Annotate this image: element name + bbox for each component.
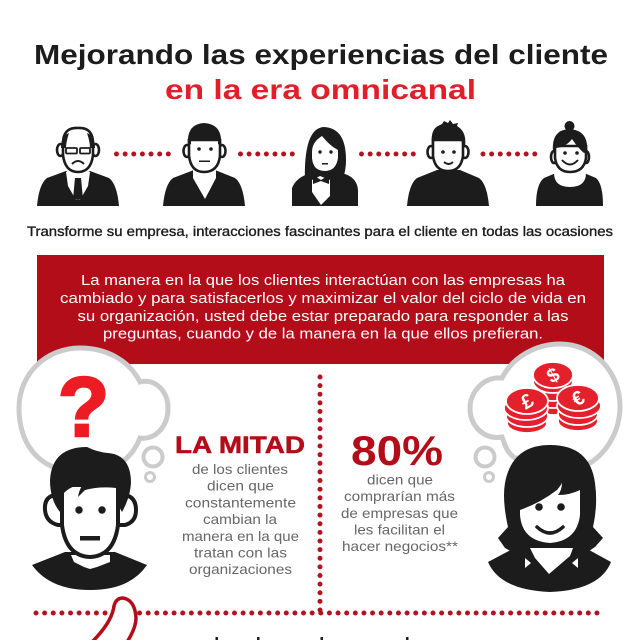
customer journey row — [37, 120, 603, 206]
stat description left: organizaciones — [189, 561, 292, 577]
stat description left: constantemente — [185, 494, 296, 510]
intro panel — [37, 255, 604, 364]
stat: la mitad: LA MITAD — [175, 432, 305, 459]
stat description right: comprarían más — [344, 488, 455, 504]
connector dots — [116, 152, 536, 156]
icon: coin stacks — [504, 362, 601, 433]
icon: woman with long hair and bow tie — [292, 127, 358, 206]
title — [34, 39, 608, 105]
stat description right: dicen que — [367, 472, 433, 488]
icon: man portrait — [32, 447, 147, 590]
stat description right: de empresas que — [341, 505, 458, 521]
stat description left: de los clientes — [192, 461, 288, 477]
intro text — [60, 272, 586, 342]
dotted dividers — [36, 377, 604, 613]
icon: thumb outline — [92, 598, 136, 640]
stat description right: les facilitan el — [354, 522, 445, 538]
icon: woman portrait — [488, 445, 611, 592]
stat description right — [341, 472, 459, 554]
intro text: preguntas, cuando y de la manera en la que ellos prefieran. — [103, 326, 543, 342]
icon: coin stacks: £ — [517, 390, 538, 414]
stat: 80% — [341, 427, 459, 554]
icon: man with spiky hair — [407, 120, 489, 206]
intro text: cambiado y para satisfacerlos y maximizar el valor del ciclo de vida en — [60, 290, 586, 307]
right thought bubble — [470, 344, 620, 482]
icon: coin stacks: $ — [543, 364, 564, 388]
icon: question mark: ? — [58, 360, 109, 454]
intro text: su organización, usted debe estar preparado para responder a las — [78, 308, 568, 325]
title: Mejorando las experiencias del cliente — [34, 39, 608, 70]
cut-off heading tops — [216, 637, 408, 640]
intro text: La manera en la que los clientes interactúan con las empresas ha — [81, 272, 566, 289]
stat description left: manera en la que — [182, 528, 299, 544]
subtitle: Transforme su empresa, interacciones fascinantes para el cliente en todas las ocasiones — [27, 224, 613, 239]
stat description left: tratan con las — [194, 544, 287, 560]
stat description left: cambian la — [203, 511, 277, 527]
stat: 80%: 80% — [351, 427, 443, 474]
icon: coin stacks: € — [568, 387, 589, 411]
title: en la era omnicanal — [165, 74, 476, 105]
stat description right: hacer negocios** — [342, 538, 459, 554]
icon: woman with hair bun — [536, 121, 603, 206]
stat: la mitad — [175, 432, 305, 577]
stat description left: dicen que — [207, 478, 274, 494]
left thought bubble — [19, 348, 168, 482]
stat description left — [182, 461, 299, 577]
icon: older man with glasses — [37, 128, 119, 206]
icon: man with short hair — [163, 123, 245, 206]
